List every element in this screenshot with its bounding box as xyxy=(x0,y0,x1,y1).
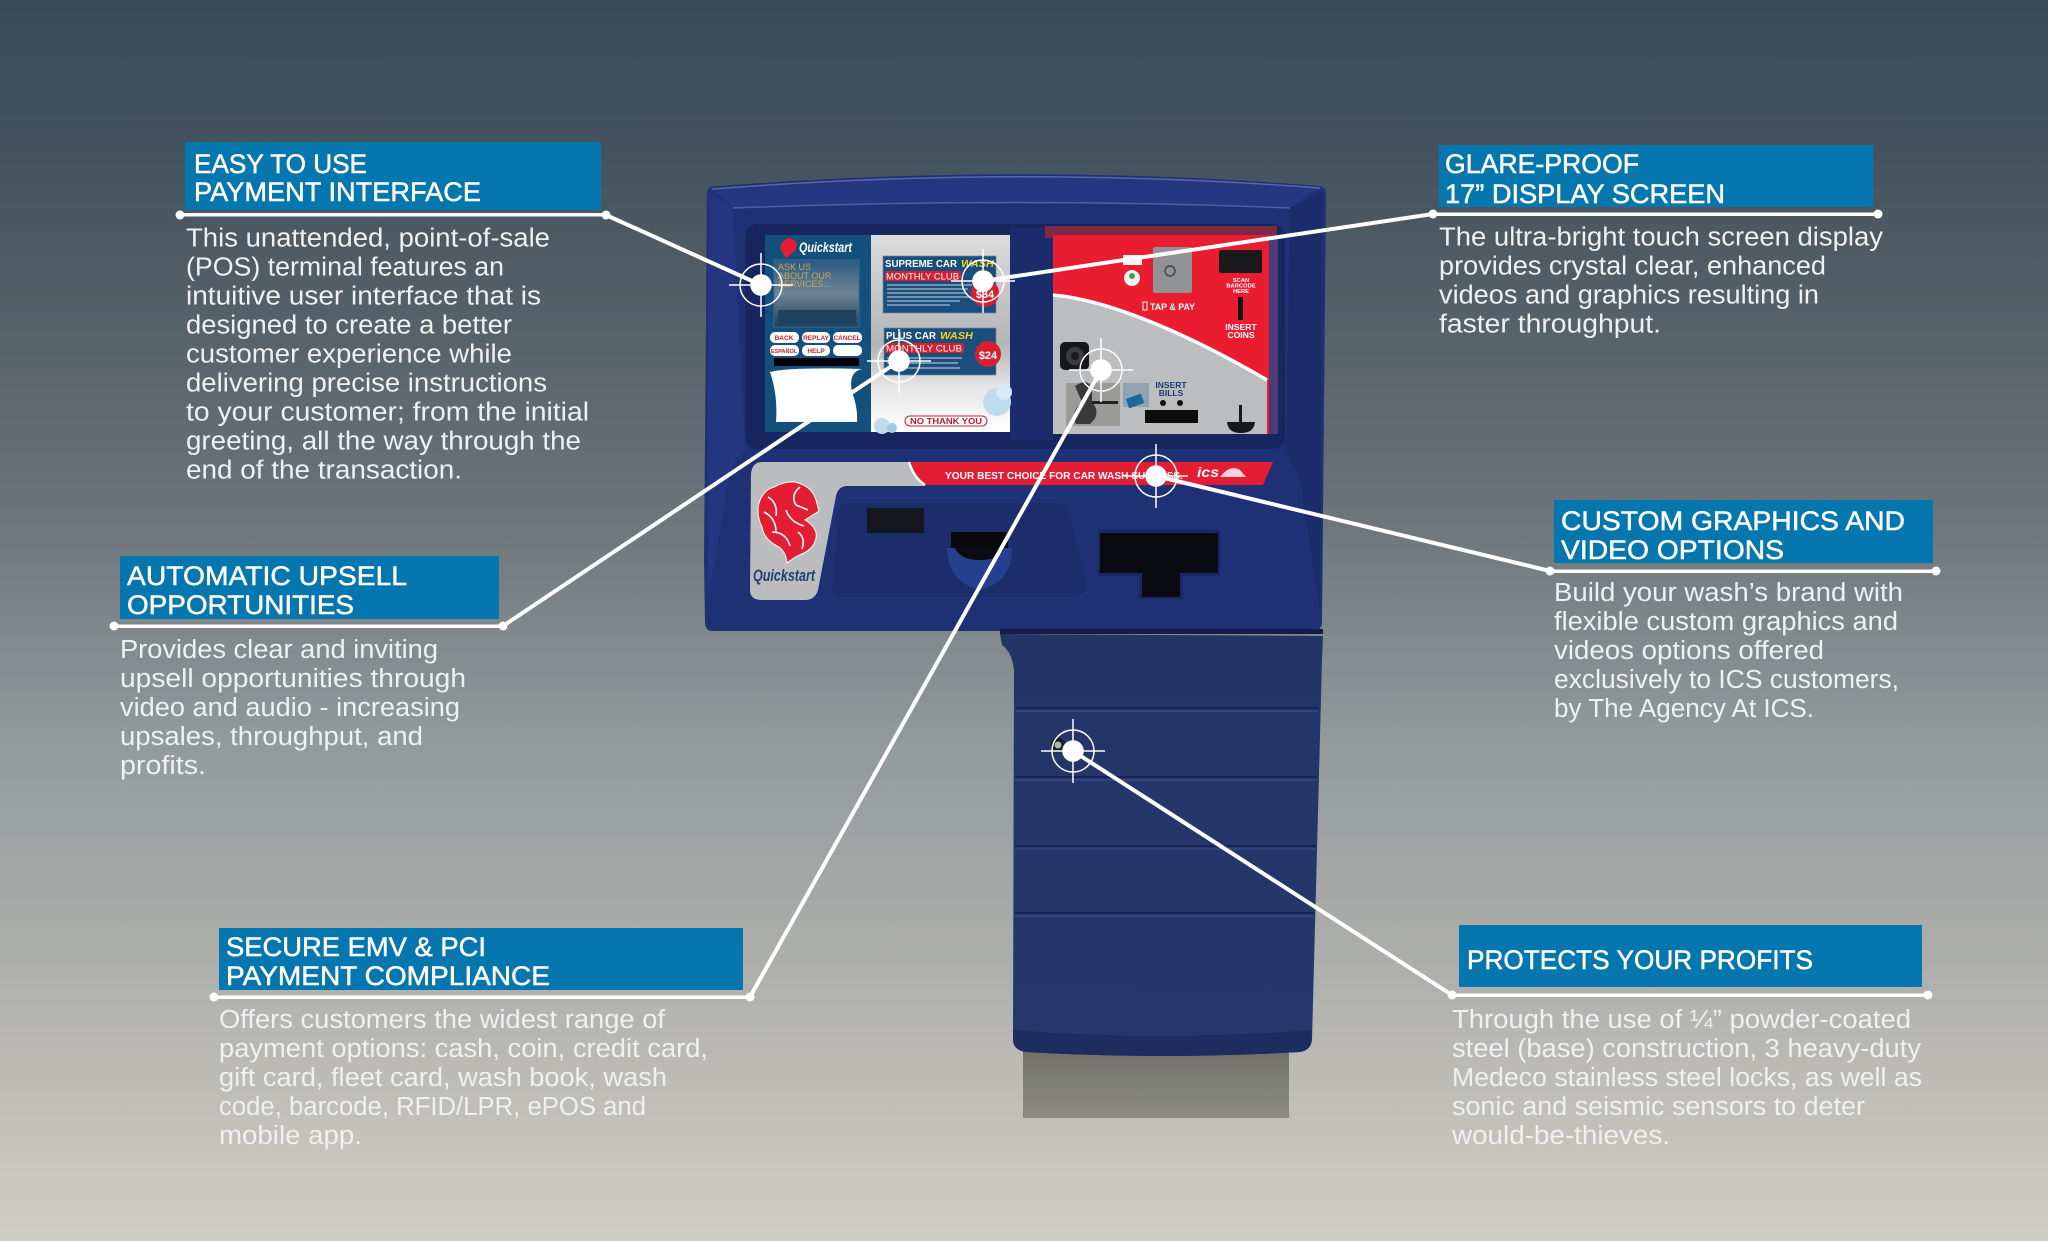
callout: automatic upsell opportunities xyxy=(110,556,508,780)
heading: easy to use: PAYMENT INTERFACE xyxy=(194,177,481,207)
body text: would-be-thieves. xyxy=(1451,1122,1670,1150)
heading: secure EMV xyxy=(219,928,743,991)
icon: red lion head logo xyxy=(758,482,819,563)
rule with end dots xyxy=(176,210,610,220)
offer card: supreme: $34 xyxy=(976,289,995,301)
heading: easy to use: EASY TO USE xyxy=(194,149,367,179)
body text: videos options offered xyxy=(1554,637,1824,665)
offer card: plus: $24 xyxy=(979,350,998,362)
payment panel: COINS xyxy=(1227,330,1255,340)
body text: provides crystal clear, enhanced xyxy=(1439,252,1826,280)
touch screen: offers panel xyxy=(871,235,1012,434)
body text: Provides clear and inviting xyxy=(120,636,438,664)
body text: mobile app. xyxy=(219,1122,362,1150)
speaker xyxy=(1060,342,1089,370)
payment panel: INSERT xyxy=(1225,322,1258,332)
payment panel: SCAN xyxy=(1233,278,1249,284)
rule with end dots xyxy=(210,992,754,1002)
crosshair: upsell xyxy=(867,329,931,393)
body text: The ultra-bright touch screen display xyxy=(1439,224,1883,252)
body text: flexible custom graphics and xyxy=(1554,608,1898,636)
callout: custom graphics and video options xyxy=(1546,500,1940,723)
crosshair: payment interface xyxy=(729,253,793,317)
payment panel xyxy=(1053,235,1269,434)
callout: glare-proof display screen xyxy=(1428,145,1883,338)
callout: easy to use payment interface xyxy=(176,142,610,484)
body text: Through the use of ¼” powder-coated xyxy=(1452,1006,1911,1034)
rule with end dots xyxy=(1546,566,1940,576)
body text: faster throughput. xyxy=(1439,310,1661,338)
body text: by The Agency At ICS. xyxy=(1554,695,1814,723)
crosshair: display screen xyxy=(951,249,1015,313)
body text: steel (base) construction, 3 heavy-duty xyxy=(1452,1035,1921,1063)
body text: (POS) terminal features an xyxy=(186,254,504,282)
video panel: SERVICES... xyxy=(778,279,831,289)
heading: glare-proof: 17” DISPLAY SCREEN xyxy=(1445,179,1725,209)
crosshair: EMV payment xyxy=(1069,338,1133,402)
body text: This unattended, point-of-sale xyxy=(186,224,550,252)
heading: protects your profits: PROTECTS YOUR PROFITS xyxy=(1467,945,1813,975)
video panel: ASK US xyxy=(778,262,811,272)
video panel xyxy=(774,260,859,327)
body text xyxy=(1554,579,1903,723)
payment panel: HERE xyxy=(1233,289,1249,295)
body text: upsales, throughput, and xyxy=(120,723,423,751)
body text: Build your wash’s brand with xyxy=(1554,579,1903,607)
callout: protects your profits xyxy=(1448,925,1932,1150)
body text: gift card, fleet card, wash book, wash xyxy=(219,1064,667,1092)
key lock xyxy=(1051,738,1065,752)
contactless reader xyxy=(1153,247,1192,293)
body text xyxy=(219,1006,708,1150)
screen buttons: ESPAÑOL xyxy=(771,348,798,355)
connector lines xyxy=(503,214,1550,997)
screen buttons: BACK xyxy=(775,335,794,342)
barcode scanner xyxy=(1219,250,1262,273)
upper housing xyxy=(704,174,1326,634)
coin cup bezel xyxy=(833,503,1086,597)
offer card: plus: MONTHLY CLUB xyxy=(886,344,962,354)
offer card: supreme: WASH xyxy=(961,259,995,270)
offer card: plus: PLUS CAR xyxy=(886,331,937,342)
screen buttons: HELP xyxy=(807,348,825,355)
touch screen: left blue panel xyxy=(765,235,871,432)
rule with end dots xyxy=(1428,210,1882,218)
body text: sonic and seismic sensors to deter xyxy=(1452,1093,1866,1121)
crosshair: lock xyxy=(1041,719,1105,783)
body text: to your customer; from the initial xyxy=(186,398,589,426)
body text: profits. xyxy=(120,752,206,780)
screen buttons xyxy=(770,332,862,356)
screen buttons: CANCEL xyxy=(833,335,861,342)
body text: designed to create a better xyxy=(186,312,513,340)
coin return lever xyxy=(1227,405,1255,433)
bill dispenser slot xyxy=(1098,530,1220,599)
payment panel: BARCODE xyxy=(1226,284,1256,290)
crosshair: custom graphics xyxy=(1124,444,1188,508)
heading: secure EMV: SECURE EMV & PCI xyxy=(226,932,486,962)
body text xyxy=(186,224,589,484)
payment panel: BILLS xyxy=(1159,388,1184,398)
stainless steel foot xyxy=(1023,1050,1289,1118)
body text: code, barcode, RFID/LPR, ePOS and xyxy=(219,1093,646,1121)
body text: videos and graphics resulting in xyxy=(1439,282,1819,310)
body text: greeting, all the way through the xyxy=(186,428,581,456)
kiosk terminal illustration xyxy=(704,174,1326,1118)
body text: upsell opportunities through xyxy=(120,665,466,693)
heading: automatic upsell xyxy=(120,556,499,620)
rule with end dots xyxy=(1448,990,1932,1000)
payment panel: TAP & PAY xyxy=(1150,302,1195,312)
video panel: ABOUT OUR xyxy=(778,271,832,281)
offer card: supreme: SUPREME CAR xyxy=(885,259,958,270)
heading: custom graphics: CUSTOM GRAPHICS AND xyxy=(1561,506,1905,536)
body text xyxy=(1451,1006,1922,1150)
body text xyxy=(1439,224,1883,338)
red slogan strip: YOUR BEST CHOICE FOR CAR WASH SUCCESS. xyxy=(945,470,1183,482)
Quickstart grey label plate xyxy=(750,462,925,600)
heading: easy to use xyxy=(185,142,601,210)
payment panel: INSERT xyxy=(1155,380,1187,390)
body text: Medeco stainless steel locks, as well as xyxy=(1452,1064,1922,1092)
touch screen: left blue panel: Quickstart xyxy=(799,239,853,255)
heading: automatic upsell: OPPORTUNITIES xyxy=(127,590,354,620)
screen buttons: REPLAY xyxy=(803,335,830,342)
display recess xyxy=(745,224,1285,449)
body text: intuitive user interface that is xyxy=(186,282,541,310)
heading: glare-proof xyxy=(1439,145,1873,209)
body text: Offers customers the widest range of xyxy=(219,1006,666,1034)
offer card: supreme xyxy=(883,256,999,313)
callout: secure EMV and PCI payment compliance xyxy=(210,928,754,1150)
heading: secure EMV: PAYMENT COMPLIANCE xyxy=(226,961,550,991)
body text: payment options: cash, coin, credit card, xyxy=(219,1035,708,1063)
red slogan strip xyxy=(909,462,1273,485)
body text: video and audio - increasing xyxy=(120,694,460,722)
body text: customer experience while xyxy=(186,340,512,368)
body text: exclusively to ICS customers, xyxy=(1554,666,1899,694)
heading: glare-proof: GLARE-PROOF xyxy=(1445,149,1639,179)
receipt shape xyxy=(770,368,862,422)
no thank you button: NO THANK YOU xyxy=(910,417,982,426)
heading: custom graphics: VIDEO OPTIONS xyxy=(1561,535,1784,565)
heading: protects your profits xyxy=(1459,925,1922,987)
Quickstart grey label plate: Quickstart xyxy=(753,566,816,585)
heading: automatic upsell: AUTOMATIC UPSELL xyxy=(127,561,407,591)
red slogan strip: ics xyxy=(1197,464,1219,480)
body text: end of the transaction. xyxy=(186,456,462,484)
offer card: supreme: MONTHLY CLUB xyxy=(886,272,959,282)
offer card: plus: WASH xyxy=(940,331,974,342)
no thank you button xyxy=(905,416,987,426)
offer card: plus xyxy=(884,328,1001,375)
lower cabinet base xyxy=(1000,634,1323,1056)
icon: Quickstart lion small xyxy=(781,238,797,258)
body text xyxy=(120,636,466,780)
rule with end dots xyxy=(110,622,508,630)
body text: delivering precise instructions xyxy=(186,370,547,398)
card reader xyxy=(1066,382,1120,426)
heading: custom graphics xyxy=(1554,500,1933,565)
